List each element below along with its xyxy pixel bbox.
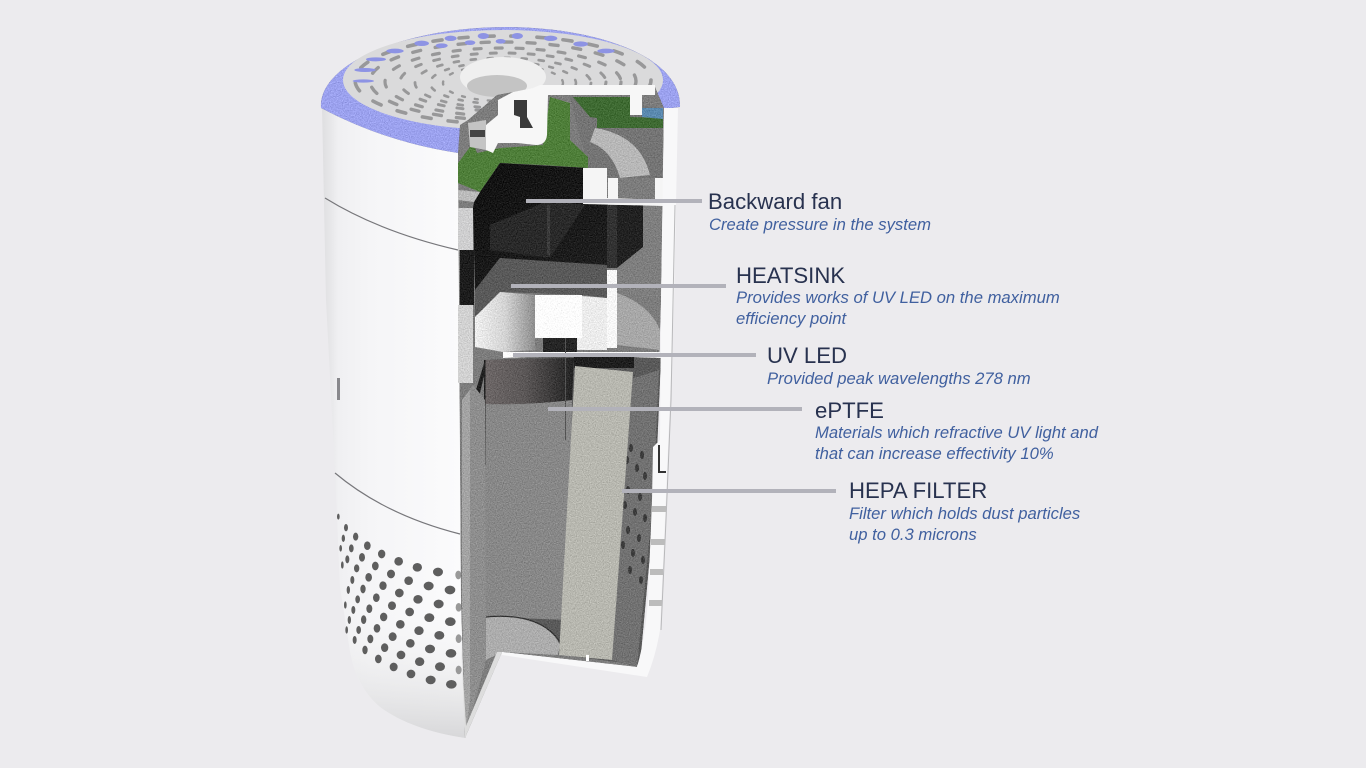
air purifier cutaway bbox=[321, 27, 680, 738]
heading: Backward fan bbox=[708, 189, 842, 214]
leader line bbox=[513, 353, 756, 357]
description: Filter which holds dust particles bbox=[849, 504, 1080, 523]
perforated top grill bbox=[343, 30, 663, 130]
callout: backward fan bbox=[526, 189, 931, 234]
description: Create pressure in the system bbox=[709, 215, 931, 234]
interior cross section bbox=[458, 87, 664, 738]
ePTFE chamber bbox=[473, 338, 661, 665]
callout: UV LED bbox=[513, 343, 1031, 388]
blue lit holes along the rear edge bbox=[353, 33, 615, 83]
left wall clip bbox=[458, 190, 480, 383]
callout: ePTFE bbox=[548, 398, 1099, 463]
leader line bbox=[526, 199, 702, 203]
upper speckled chamber bbox=[570, 97, 663, 178]
white wall sections bbox=[468, 85, 678, 677]
description: efficiency point bbox=[736, 309, 847, 328]
leader line bbox=[511, 284, 726, 288]
filter mount notch bbox=[586, 655, 589, 661]
top grill section bbox=[486, 85, 655, 153]
description: Provided peak wavelengths 278 nm bbox=[767, 369, 1031, 388]
HEPA filter block bbox=[559, 366, 633, 660]
blue light rim bbox=[321, 27, 680, 153]
hub dark cavity bbox=[514, 100, 533, 128]
grill hole rings bbox=[355, 36, 651, 124]
heading: ePTFE bbox=[815, 398, 884, 423]
outer white shell bbox=[322, 106, 465, 738]
heatsink fins bbox=[475, 258, 607, 317]
callout: heatsink bbox=[511, 263, 1060, 328]
fan shroud pieces bbox=[583, 168, 665, 206]
right wall notch and clips bbox=[649, 445, 666, 606]
backward fan housing bbox=[473, 163, 661, 300]
UV LED plate bbox=[503, 352, 660, 358]
callout: HEPA filter bbox=[622, 478, 1080, 544]
description: Materials which refractive UV light and bbox=[815, 423, 1098, 442]
interior base bbox=[458, 87, 664, 738]
left wall of cutaway bbox=[462, 385, 486, 738]
perforated air intake holes bbox=[337, 514, 462, 689]
leader line bbox=[622, 489, 836, 493]
heatsink body bbox=[475, 270, 660, 353]
heading: HEPA FILTER bbox=[849, 478, 987, 503]
wall outline bbox=[661, 205, 675, 630]
heading: HEATSINK bbox=[736, 263, 845, 288]
infographic bbox=[320, 27, 1098, 738]
description: up to 0.3 microns bbox=[849, 525, 977, 544]
central hub bbox=[460, 57, 546, 97]
leader line bbox=[548, 407, 802, 411]
grey hub mechanism bbox=[468, 120, 486, 150]
rear perforated chamber wall bbox=[612, 370, 659, 667]
description: that can increase effectivity 10% bbox=[815, 444, 1054, 463]
green circuit board bbox=[458, 97, 663, 192]
shell cut edge at base bbox=[461, 640, 502, 738]
right outer wall bbox=[502, 108, 678, 677]
heading: UV LED bbox=[767, 343, 847, 368]
description: Provides works of UV LED on the maximum bbox=[736, 288, 1060, 307]
